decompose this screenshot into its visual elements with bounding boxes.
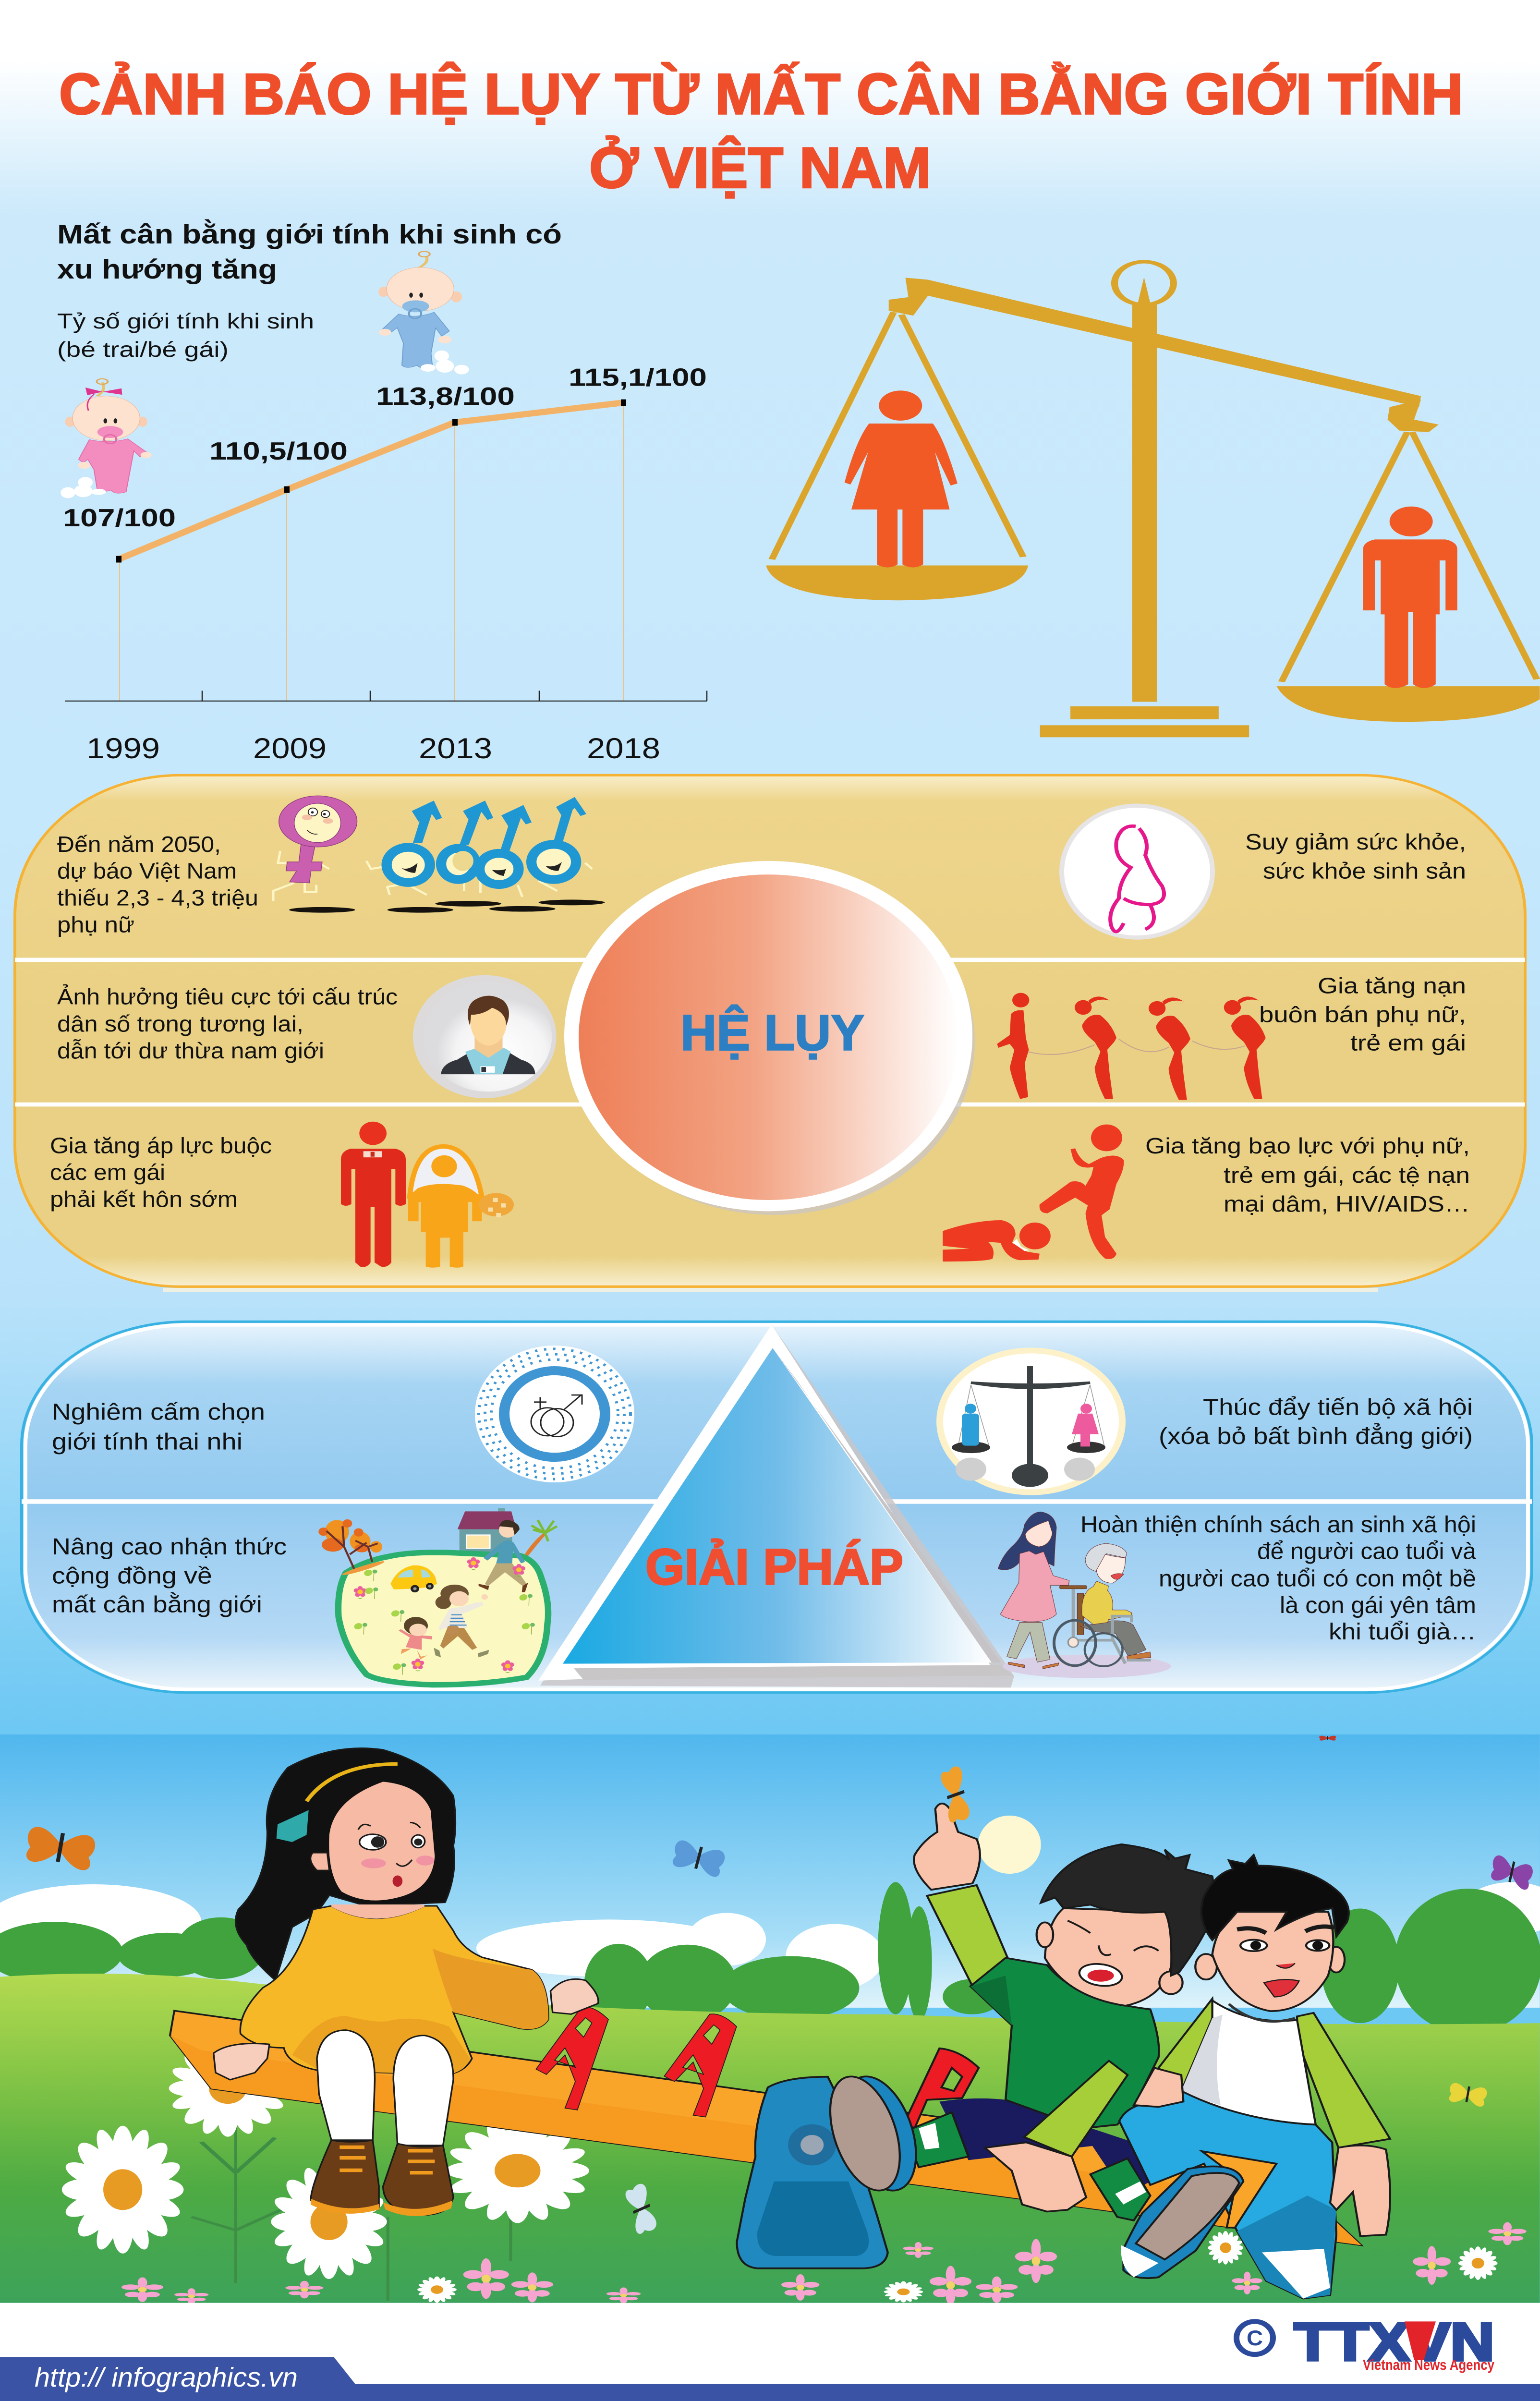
text: raise awareness: cộng đồng về [52,1563,212,1589]
line chart: 2009 [253,732,327,764]
text: social security: là con gái yên tâm [1280,1593,1476,1618]
giải pháp triangle [538,1324,1014,1687]
strip under panel [163,1288,1378,1292]
text: 2050 forecast: phụ nữ [57,912,134,937]
text: early marriage: các em gái [50,1160,165,1185]
text: 2050 forecast [57,832,258,937]
icon: trafficked figures [997,993,1266,1100]
title [59,61,1463,200]
line chart: 2018 [587,732,660,764]
icon: caregiver and elderly woman [998,1512,1171,1678]
seesaw beam [170,2011,1361,2245]
text: violence: mại dâm, HIV/AIDS… [1224,1191,1470,1216]
panel: giải pháp [22,1322,1532,1693]
text: early marriage: Gia tăng áp lực buộc [50,1133,272,1158]
line chart: 115,1/100 [569,363,707,391]
chart subtitle: (bé trai/bé gái) [57,338,229,362]
text: health [1245,829,1466,884]
chart heading: xu hướng tăng [57,255,277,285]
logo: TTXVN [1294,2312,1494,2372]
icon: gender symbols in ring [475,1346,634,1482]
seesaw base [737,2077,888,2268]
text: health: sức khỏe sinh sản [1263,858,1466,884]
right pan [1276,432,1540,722]
icon: balanced scale [940,1350,1122,1492]
line chart: 1999 [86,732,160,764]
text: social security: người cao tuổi có con một bề [1159,1566,1476,1591]
text: 2050 forecast: thiếu 2,3 - 4,3 triệu [57,885,258,910]
text: violence: Gia tăng bạo lực với phụ nữ, [1145,1133,1470,1158]
scene: children on seesaw [0,1734,1540,2304]
icon: gender symbols [273,796,605,913]
icon: man portrait [413,975,556,1098]
icon: woman figure [845,390,958,568]
source url: http:// infographics.vn [35,2362,298,2393]
logo: C [1247,2327,1263,2350]
icon: violence figures [943,1125,1124,1261]
text: 2050 forecast: Đến năm 2050, [57,832,221,857]
boy in green [817,1804,1216,2220]
text: social progress: (xóa bỏ bất bình đẳng giới) [1159,1423,1473,1449]
text: ban sex selection [52,1399,265,1455]
text: violence [1145,1133,1470,1216]
text: ban sex selection: giới tính thai nhi [52,1429,243,1455]
line chart: 113,8/100 [376,382,515,410]
seesaw handles [536,2007,979,2128]
chart heading [57,219,562,285]
butterflies [24,1736,1534,2236]
text: health: Suy giảm sức khỏe, [1245,829,1466,854]
text: population structure: dân số trong tương lai, [57,1011,303,1036]
hệ lụy circle [564,861,975,1215]
text: trafficking: Gia tăng nạn [1318,973,1466,998]
text: trafficking [1259,973,1466,1055]
chart subtitle: Tỷ số giới tính khi sinh [57,309,314,333]
sky and meadow background [0,1734,1540,2304]
text: early marriage: phải kết hôn sớm [50,1187,238,1212]
text: ban sex selection: Nghiêm cấm chọn [52,1399,265,1425]
line chart: 2013 [419,732,492,764]
line chart: 110,5/100 [209,437,348,465]
text: population structure: Ảnh hưởng tiêu cực tới cấu trúc [57,984,398,1009]
text: raise awareness: Nâng cao nhận thức [52,1534,287,1560]
left pan [766,312,1028,600]
girl [214,1748,598,2216]
boy in white [1119,1855,1390,2299]
line chart [63,363,707,764]
icon: family park [318,1508,557,1685]
text: social security: để người cao tuổi và [1257,1539,1477,1564]
text: population structure [57,984,398,1063]
icon: baby girl [61,379,152,498]
text: social progress [1159,1395,1473,1449]
panel: hệ lụy [15,775,1525,1286]
text: trafficking: buôn bán phụ nữ, [1259,1002,1466,1027]
text: raise awareness [52,1534,287,1617]
icon: groom and child bride [341,1122,514,1268]
line chart: 107/100 [63,504,176,532]
text: social security: Hoàn thiện chính sách an sinh xã hội [1080,1512,1476,1538]
giải pháp triangle: GIẢI PHÁP [645,1539,903,1595]
footer [0,2303,1540,2401]
text: social security [1080,1512,1477,1645]
text: violence: trẻ em gái, các tệ nạn [1224,1163,1470,1188]
icon: baby boy [378,251,469,375]
text: raise awareness: mất cân bằng giới [52,1592,262,1617]
text: 2050 forecast: dự báo Việt Nam [57,858,237,884]
scale beam and stand [889,262,1439,737]
text: trafficking: trẻ em gái [1350,1030,1466,1055]
title: Ở VIỆT NAM [589,135,931,200]
chart heading: Mất cân bằng giới tính khi sinh có [57,219,562,250]
text: population structure: dẫn tới dư thừa nam giới [57,1038,324,1063]
icon: pregnant woman [1062,806,1213,937]
text: social progress: Thúc đẩy tiến bộ xã hội [1203,1395,1473,1420]
text: social security: khi tuổi già… [1329,1619,1476,1645]
chart subtitle [57,309,314,362]
hệ lụy circle: HỆ LỤY [680,1005,864,1061]
text: early marriage [50,1133,272,1212]
scale [766,262,1540,737]
icon: man figure [1363,507,1457,688]
